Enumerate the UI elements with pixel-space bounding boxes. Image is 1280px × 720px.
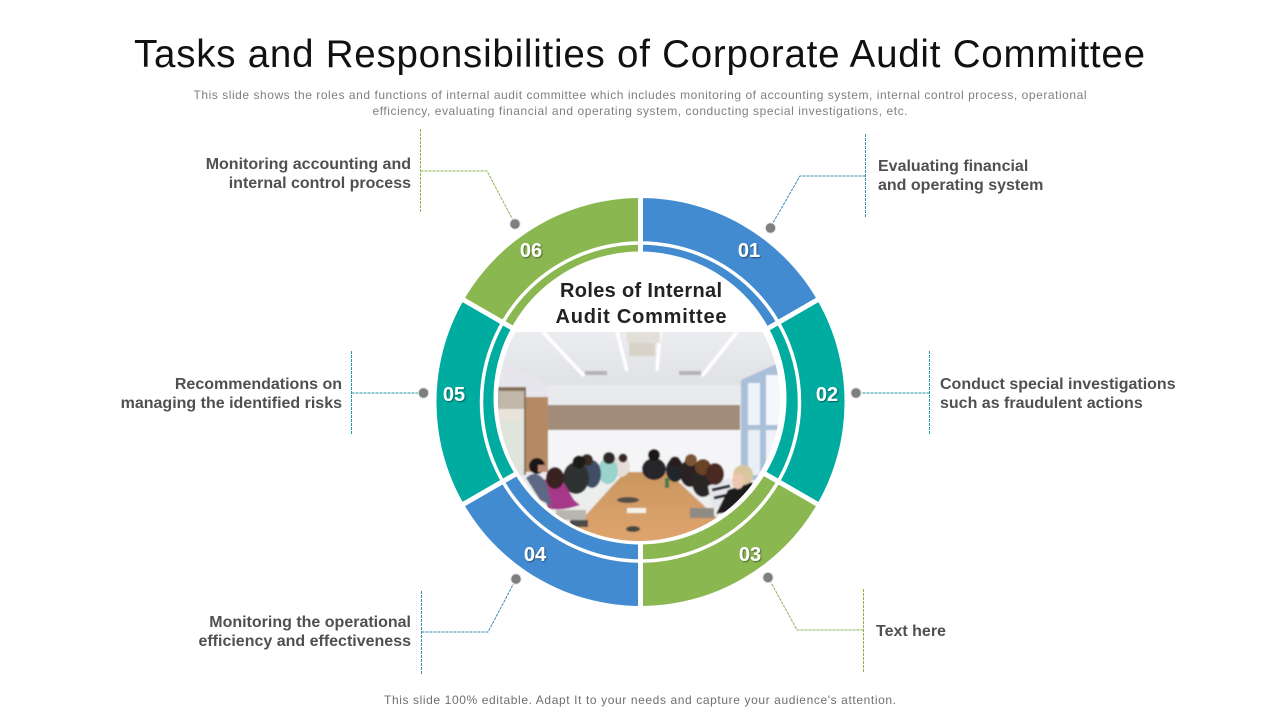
label: monitoring operational: efficiency and effectiveness	[198, 633, 411, 650]
ceiling	[520, 366, 766, 384]
segment 06 green	[464, 198, 640, 402]
label: evaluating financial	[878, 158, 1043, 194]
table	[576, 471, 718, 541]
subtitle text block: This slide shows the roles and functions of internal audit committee which includes monitoring of accounting system, internal control process, operational	[194, 88, 1087, 102]
wood door	[526, 397, 548, 472]
label: special investigations: Conduct special investigations	[940, 376, 1176, 393]
center heading: Audit Committee	[556, 306, 726, 328]
connector: recommendations	[352, 351, 423, 435]
label: evaluating financial: and operating system	[878, 177, 1043, 194]
connector: monitoring accounting	[420, 129, 515, 224]
right window	[740, 364, 778, 480]
number labels: 05	[443, 384, 465, 406]
connector: monitoring operational	[422, 579, 516, 675]
segment gaps	[456, 190, 825, 614]
label: evaluating financial: Evaluating financial	[878, 158, 1028, 175]
number labels: 02	[816, 384, 838, 406]
label: recommendations: Recommendations on	[175, 376, 342, 393]
title: Tasks and Responsibilities of Corporate Audit Committee	[134, 33, 1145, 76]
connector: evaluating financial	[770, 134, 866, 228]
number labels: 03	[739, 544, 761, 566]
segment 01 blue	[640, 198, 817, 402]
connector: special investigations	[856, 351, 930, 435]
circular diagram	[436, 190, 845, 614]
connector: text here	[768, 577, 864, 673]
segment 02 teal	[640, 300, 845, 504]
label: monitoring accounting: Monitoring accounting and	[206, 156, 411, 173]
segment 03 green	[640, 402, 817, 606]
connector dots	[418, 219, 861, 584]
laptops and items	[556, 510, 586, 520]
label: recommendations	[121, 376, 342, 412]
center heading: Roles of Internal	[560, 280, 722, 302]
left window	[496, 387, 526, 475]
label: monitoring accounting	[206, 156, 411, 192]
label: special investigations	[940, 376, 1176, 412]
subtitle text block	[194, 88, 1087, 118]
label: monitoring operational	[198, 614, 411, 650]
number labels: 01	[738, 240, 760, 262]
label: monitoring operational: Monitoring the operational	[209, 614, 411, 631]
segment 04 blue	[464, 402, 640, 606]
ring divider	[482, 243, 800, 561]
label: special investigations: such as fraudulent actions	[940, 395, 1143, 412]
label: monitoring accounting: internal control process	[229, 175, 411, 192]
people	[526, 449, 760, 514]
center heading	[556, 280, 726, 328]
number labels: 04	[524, 544, 547, 566]
number labels	[443, 240, 838, 566]
inner white disc	[494, 252, 786, 544]
ceiling lights	[543, 332, 737, 376]
wall band	[547, 405, 740, 430]
number labels: 06	[520, 240, 542, 262]
footer note: This slide 100% editable. Adapt It to your needs and capture your audience's attention.	[384, 693, 896, 707]
segment 05 teal	[436, 300, 640, 504]
center photo: meeting room	[498, 332, 780, 541]
label: text here: Text here	[876, 623, 946, 640]
subtitle text block: efficiency, evaluating financial and operating system, conducting special investigations, etc.	[372, 104, 908, 118]
label: recommendations: managing the identified risks	[121, 395, 342, 412]
